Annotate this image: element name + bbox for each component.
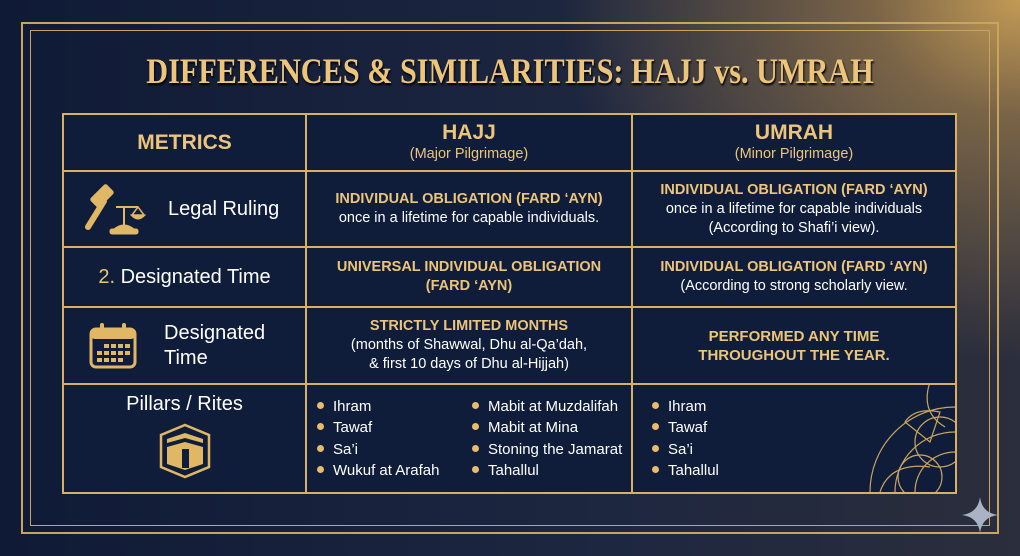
umrah pillars: Ihram: [668, 398, 706, 414]
row label: designated time: Designated: [164, 322, 265, 344]
hajj obligation: UNIVERSAL INDIVIDUAL OBLIGATION: [337, 259, 601, 275]
umrah obligation: INDIVIDUAL OBLIGATION (FARD ‘AYN): [660, 259, 928, 275]
header: hajj: HAJJ: [442, 121, 496, 144]
umrah time: PERFORMED ANY TIME: [709, 328, 879, 344]
hajj pillars: [305, 383, 633, 494]
umrah pillars: Tahallul: [668, 462, 719, 479]
icon: kaaba: [160, 424, 210, 478]
header: umrah: UMRAH: [755, 121, 833, 144]
hajj pillars: Tawaf: [333, 419, 372, 436]
row label: legal ruling: [62, 170, 307, 248]
umrah pillars: [631, 383, 957, 494]
hajj pillars: Stoning the Jamarat: [488, 440, 622, 458]
hajj legal ruling: once in a lifetime for capable individuals.: [339, 210, 599, 226]
header: metrics: METRICS: [137, 131, 232, 154]
hajj pillars: Mabit at Mina: [488, 419, 578, 436]
header: hajj: [305, 113, 633, 172]
umrah pillars: Tawaf: [668, 419, 707, 436]
umrah obligation: [631, 246, 957, 308]
hajj legal ruling: [305, 170, 633, 248]
row label: pillars / rites: [62, 383, 307, 494]
umrah time: THROUGHOUT THE YEAR.: [698, 346, 890, 364]
hajj pillars: Ihram: [333, 398, 371, 414]
hajj obligation: [305, 246, 633, 308]
row label: designated time 2: 2. Designated Time: [98, 266, 271, 288]
hajj pillars: Wukuf at Arafah: [333, 462, 439, 479]
umrah legal ruling: INDIVIDUAL OBLIGATION (FARD ‘AYN): [660, 182, 928, 198]
hajj pillars: Tahallul: [488, 462, 539, 479]
umrah legal ruling: (According to Shafi’i view).: [709, 220, 879, 236]
row label: designated time: [62, 306, 307, 385]
hajj pillars: Sa’i: [333, 440, 358, 458]
header: umrah: (Minor Pilgrimage): [735, 146, 853, 162]
header: metrics: [62, 113, 307, 172]
hajj legal ruling: INDIVIDUAL OBLIGATION (FARD ‘AYN): [335, 191, 603, 207]
hajj time: [305, 306, 633, 385]
hajj pillars: Mabit at Muzdalifah: [488, 398, 618, 414]
row label: pillars / rites: Pillars / Rites: [126, 393, 243, 415]
hajj obligation: (FARD ‘AYN): [426, 278, 512, 294]
title: DIFFERENCES & SIMILARITIES: HAJJ vs. UMRAH: [146, 51, 874, 91]
decorative mandala corner: [869, 385, 955, 492]
comparison table: [62, 113, 957, 494]
hajj time: STRICTLY LIMITED MONTHS: [370, 318, 568, 334]
row label: designated time: Time: [164, 346, 208, 368]
header: hajj: (Major Pilgrimage): [410, 146, 528, 162]
umrah legal ruling: [631, 170, 957, 248]
umrah time: [631, 306, 957, 385]
umrah pillars: Sa’i: [668, 440, 693, 458]
icon: calendar: [90, 323, 136, 368]
hajj time: & first 10 days of Dhu al-Hijjah): [369, 356, 569, 372]
row label: designated time 2: [62, 246, 307, 308]
header: umrah: [631, 113, 957, 172]
umrah obligation: (According to strong scholarly view.: [680, 278, 908, 294]
hajj time: (months of Shawwal, Dhu al-Qa’dah,: [351, 337, 587, 353]
icon: sparkle: [962, 497, 998, 533]
umrah legal ruling: once in a lifetime for capable individuals: [666, 200, 922, 216]
row label: legal ruling: Legal Ruling: [168, 198, 279, 220]
icon: gavel and scales: [85, 184, 146, 234]
